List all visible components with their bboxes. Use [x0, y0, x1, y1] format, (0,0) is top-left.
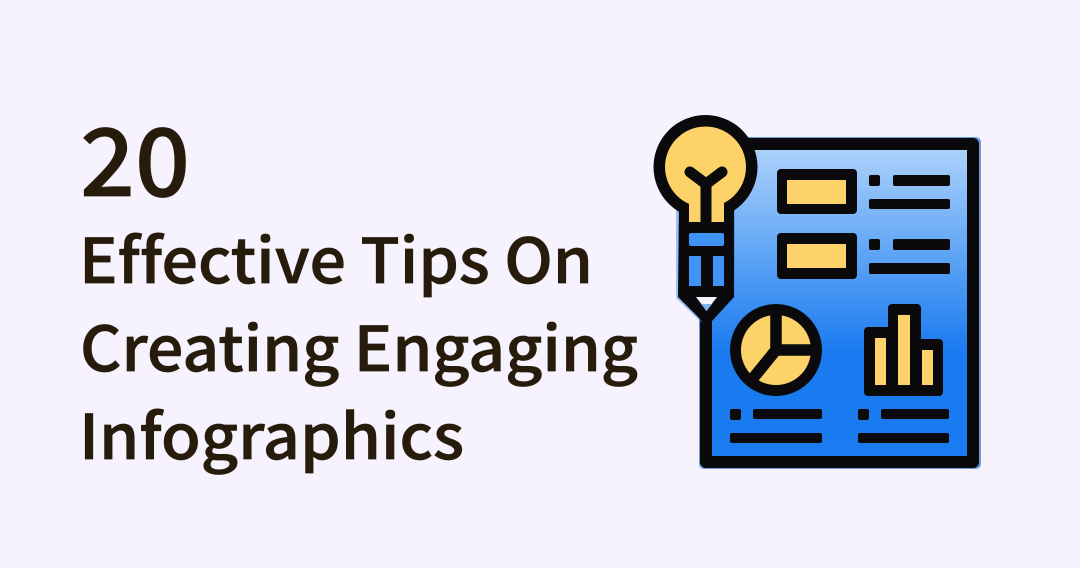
title line 1: Effective Tips On	[79, 211, 593, 301]
icon: bar chart	[864, 304, 943, 396]
icon: lightbulb pencil	[654, 115, 758, 330]
title line 3: Infographics	[79, 387, 464, 477]
content block 1	[777, 169, 950, 214]
icon: pie chart	[730, 304, 822, 396]
title	[79, 88, 638, 477]
bottom left text lines	[730, 409, 822, 443]
bottom right text lines	[858, 409, 949, 443]
document panel	[699, 137, 981, 469]
content block 2	[777, 233, 950, 279]
number 20: 20	[80, 88, 190, 224]
icon: infographic document with lightbulb pencil	[654, 115, 981, 469]
title line 2: Creating Engaging	[80, 299, 638, 389]
